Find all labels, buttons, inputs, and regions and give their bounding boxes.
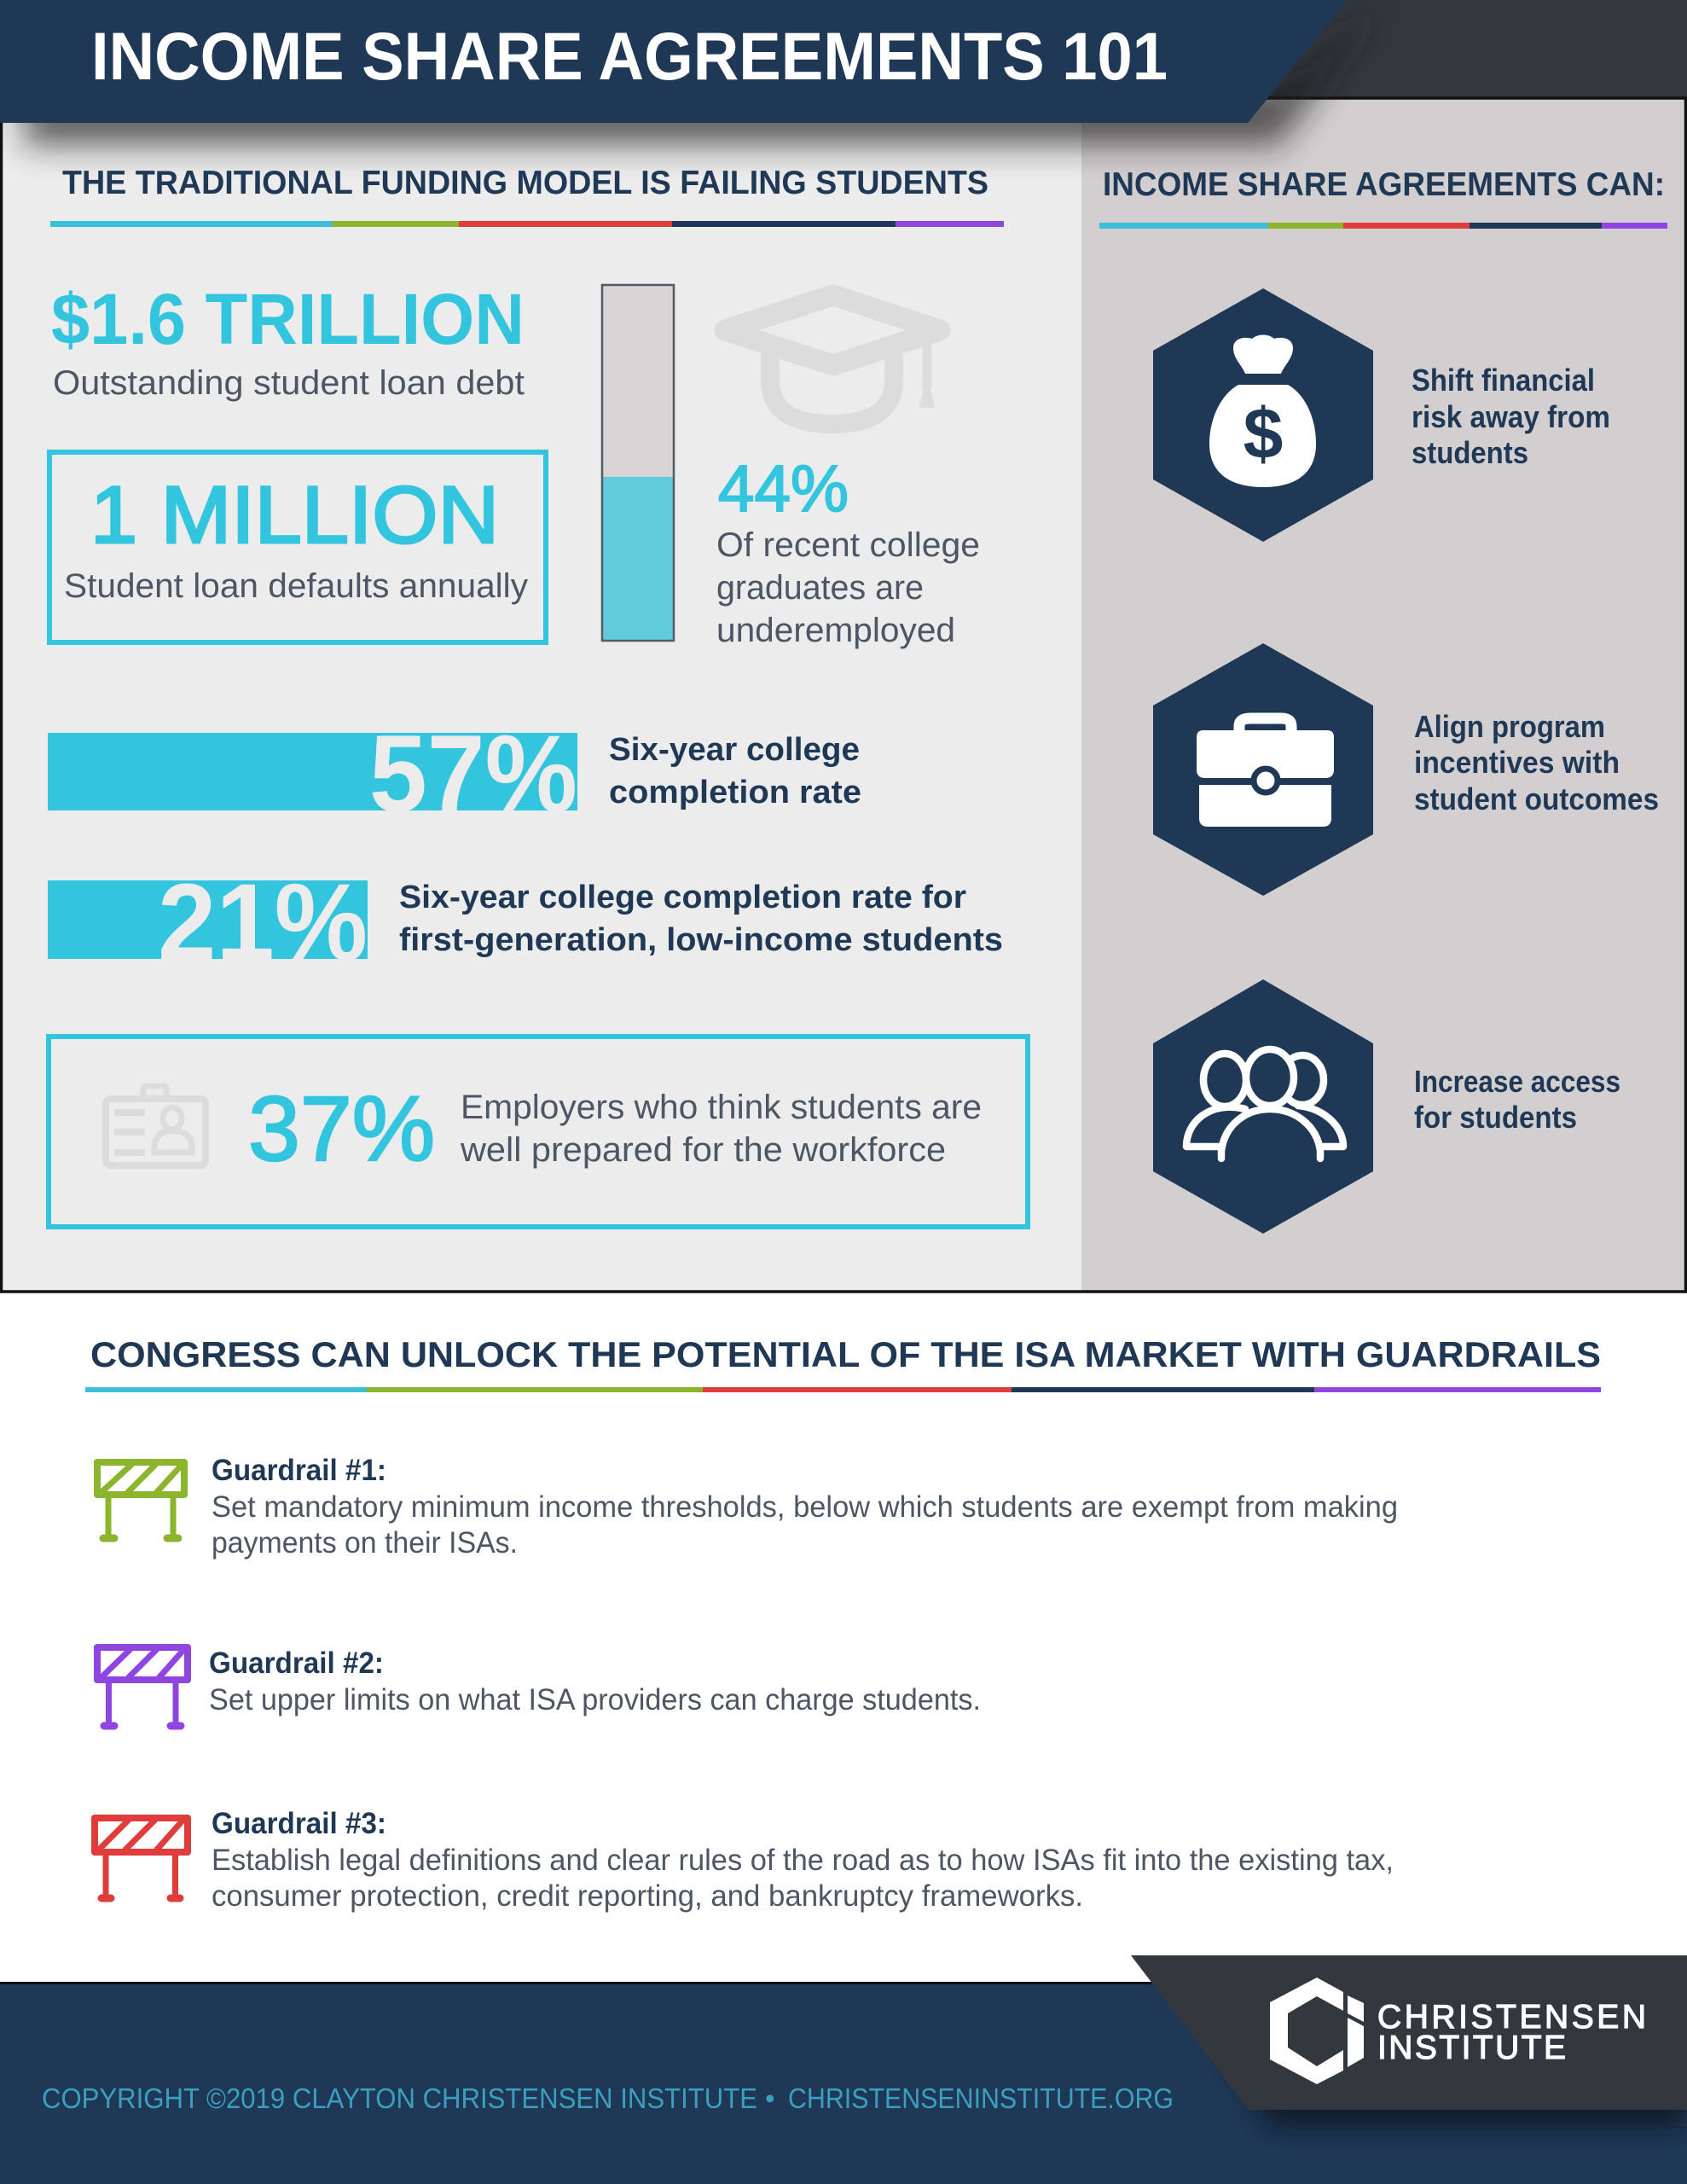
- top right dark band: [1194, 0, 1687, 97]
- label: 57 percent completion: completion rate: [609, 775, 861, 810]
- bar: 57 percent: 57%: [369, 713, 577, 835]
- section heading: ISAs can: [1099, 166, 1667, 229]
- thermometer gauge 44 percent: [602, 285, 674, 641]
- bar: 57 percent: [48, 733, 577, 810]
- stat: 44 percent underemployed: Of recent college: [716, 526, 980, 564]
- bar: 21 percent: 21%: [158, 862, 368, 984]
- icon: green barrier: [97, 1462, 184, 1538]
- guardrail 1 text: payments on their ISAs.: [212, 1526, 518, 1560]
- stat: 44 percent underemployed: [716, 452, 980, 649]
- text: shift financial risk: students: [1412, 435, 1528, 470]
- panel: income share agreements background: [1081, 98, 1687, 1292]
- footer logo panel: [1131, 1955, 1687, 2110]
- footer copyright: •: [765, 2082, 775, 2114]
- guardrail 1 text: Set mandatory minimum income thresholds, below which students are exempt from making: [212, 1490, 1398, 1524]
- text: increase access: [1414, 1064, 1620, 1135]
- icon: money bag hexagon: [1153, 288, 1373, 542]
- label: 57 percent completion: Six-year college: [609, 732, 860, 768]
- guardrail 3 text: consumer protection, credit reporting, and bankruptcy frameworks.: [212, 1879, 1083, 1913]
- guardrail 2 text: Guardrail #2:: [209, 1647, 384, 1680]
- footer logo shadow: [1194, 2001, 1687, 2126]
- stat box: 1 million defaults: [49, 452, 546, 642]
- stat box: 37 percent employers: well prepared for the workforce: [460, 1131, 946, 1169]
- section heading: traditional model: [50, 165, 1004, 227]
- logo: christensen institute: [1270, 1978, 1646, 2084]
- label: 21 percent completion: [399, 880, 1003, 958]
- guardrail 3 text: Guardrail #3:: [212, 1807, 386, 1840]
- label: 21 percent completion: Six-year college completion rate for: [399, 880, 966, 915]
- guardrail 3 text: Establish legal definitions and clear rules of the road as to how ISAs fit into the existing tax,: [212, 1844, 1394, 1877]
- stat box: 37 percent employers: Employers who think students are: [461, 1089, 982, 1126]
- label: 21 percent completion: first-generation, low-income students: [399, 922, 1003, 958]
- text: shift financial risk: risk away from: [1412, 399, 1610, 434]
- guardrail 1 text: [212, 1454, 1398, 1560]
- guardrail 2 text: Set upper limits on what ISA providers can charge students.: [209, 1683, 981, 1716]
- text: align program incentives: Align program: [1414, 709, 1605, 744]
- panel outline: [2, 0, 1685, 1292]
- header banner: [0, 0, 1348, 123]
- stat box: 1 million defaults: 1 MILLION: [90, 470, 499, 561]
- footer band: [0, 1982, 1687, 2184]
- text: align program incentives: incentives with: [1414, 745, 1620, 780]
- icon: id badge: [106, 1086, 206, 1165]
- guardrail 3 text: [212, 1807, 1394, 1913]
- icon: money bag hexagon: $: [1244, 393, 1283, 473]
- guardrail 1 text: Guardrail #1:: [212, 1454, 386, 1487]
- icon: briefcase hexagon: [1153, 643, 1373, 896]
- icon: purple barrier: [97, 1647, 188, 1726]
- text: increase access: for students: [1414, 1100, 1577, 1135]
- guardrail 2 text: [209, 1647, 981, 1716]
- logo: christensen institute: CHRISTENSEN: [1377, 1999, 1646, 2036]
- stat box: 37 percent employers: 37%: [248, 1077, 435, 1180]
- footer copyright: [42, 2082, 1174, 2114]
- text: align program incentives: student outcomes: [1414, 781, 1659, 816]
- logo: christensen institute: INSTITUTE: [1377, 2030, 1566, 2066]
- stat box: 37 percent employers: [49, 1037, 1028, 1227]
- text: shift financial risk: [1412, 363, 1610, 470]
- icon: people hexagon: [1153, 979, 1373, 1234]
- section heading: ISAs can: INCOME SHARE AGREEMENTS CAN:: [1103, 166, 1665, 203]
- text: align program incentives: [1414, 709, 1659, 816]
- bar: 21 percent: [48, 880, 368, 959]
- stat: 44 percent underemployed: graduates are: [716, 569, 924, 607]
- label: 57 percent completion: [609, 732, 861, 810]
- section heading: traditional model: THE TRADITIONAL FUNDING MODEL IS FAILING STUDENTS: [62, 165, 988, 201]
- section heading: congress guardrails: CONGRESS CAN UNLOCK THE POTENTIAL OF THE ISA MARKET WITH GUARDRAILS: [90, 1334, 1601, 1374]
- stat: 1.6 trillion debt: Outstanding student loan debt: [53, 364, 525, 402]
- section heading: congress guardrails: [85, 1334, 1601, 1392]
- header shadow: [24, 0, 1382, 145]
- stat: 1.6 trillion debt: $1.6 TRILLION: [51, 279, 525, 359]
- icon: red barrier: [95, 1818, 188, 1898]
- title: INCOME SHARE AGREEMENTS 101: [91, 18, 1168, 94]
- footer copyright: COPYRIGHT ©2019 CLAYTON CHRISTENSEN INSTITUTE: [42, 2082, 757, 2114]
- text: shift financial risk: Shift financial: [1412, 363, 1595, 398]
- icon: graduation cap: [725, 295, 940, 424]
- panel: traditional funding model background: [0, 0, 1081, 1292]
- stat box: 1 million defaults: Student loan defaults annually: [64, 567, 528, 605]
- stat: 1.6 trillion debt: [51, 279, 525, 402]
- footer copyright: CHRISTENSENINSTITUTE.ORG: [788, 2082, 1174, 2114]
- stat: 44 percent underemployed: underemployed: [716, 612, 955, 649]
- text: increase access: Increase access: [1414, 1064, 1620, 1099]
- stat: 44 percent underemployed: 44%: [718, 452, 849, 526]
